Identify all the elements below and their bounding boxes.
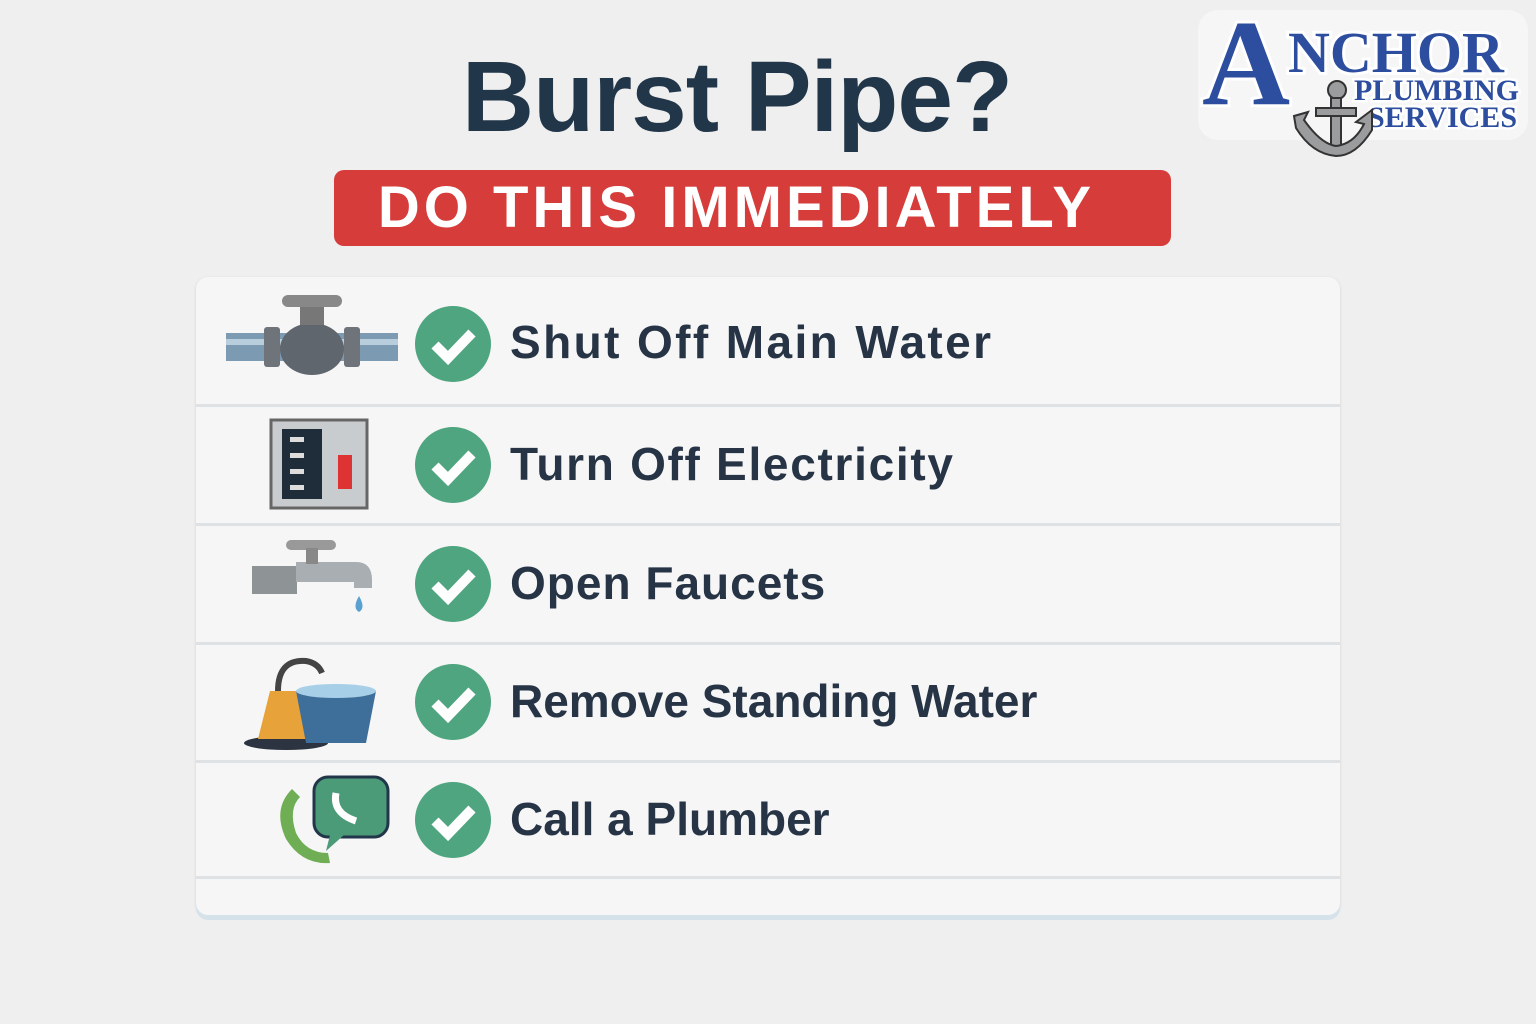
check icon — [415, 546, 491, 622]
logo — [1200, 4, 1521, 157]
check icon — [415, 782, 491, 858]
row 2 — [196, 407, 1340, 526]
icon: breaker panel — [270, 418, 368, 510]
title: Burst Pipe? — [462, 41, 1012, 153]
row 5 — [196, 763, 1340, 879]
icon: pump and bucket — [244, 658, 376, 750]
row 1 — [196, 277, 1340, 407]
icon: valve — [226, 295, 398, 375]
panel: checklist — [196, 277, 1340, 915]
icon: phone call — [280, 776, 390, 864]
logo: PLUMBING — [1354, 74, 1519, 107]
logo: SERVICES — [1368, 101, 1517, 134]
red banner: DO THIS IMMEDIATELY — [378, 175, 1095, 240]
icon: faucet — [252, 540, 372, 612]
step text: Turn Off Electricity — [510, 438, 955, 490]
check icon — [415, 427, 491, 503]
step text: Remove Standing Water — [510, 675, 1037, 727]
step text: Shut Off Main Water — [510, 316, 993, 368]
row 4 — [196, 645, 1340, 763]
step text: Open Faucets — [510, 557, 826, 609]
row 3 — [196, 526, 1340, 645]
check icon — [415, 664, 491, 740]
step text: Call a Plumber — [510, 793, 830, 845]
logo: NCHOR — [1288, 20, 1505, 85]
check icon — [415, 306, 491, 382]
